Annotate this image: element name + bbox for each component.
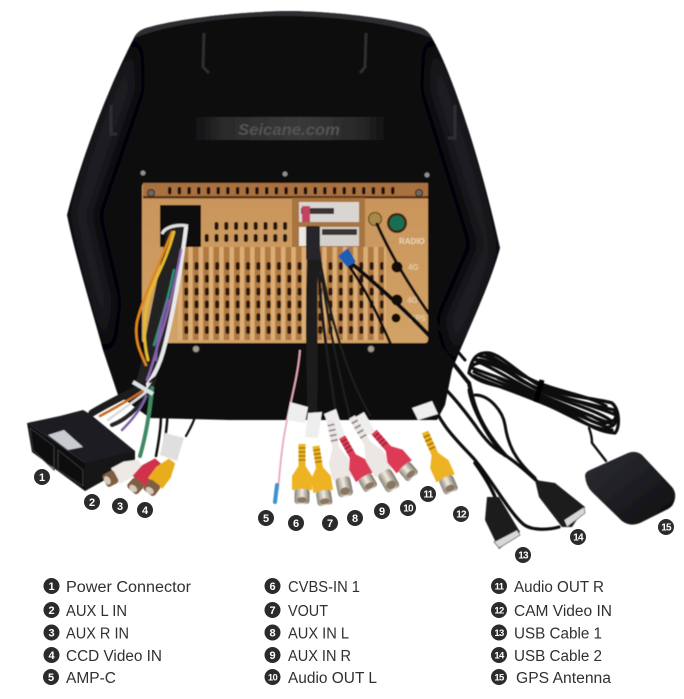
callout 8: 8: [352, 513, 358, 525]
callout 13: 13: [518, 550, 529, 562]
red plug: [125, 455, 165, 497]
legend item 8: AUX IN L: [288, 626, 349, 642]
legend item 15: 15: [494, 672, 505, 684]
legend item 2: AUX L IN: [66, 603, 127, 620]
callout 1: 1: [39, 472, 45, 484]
USB cable 2 plug: [535, 480, 585, 527]
callout 9: 9: [379, 506, 385, 518]
callout 11: 11: [424, 490, 434, 500]
legend item 9: [264, 647, 351, 665]
illustration: head unit and cables: [27, 11, 675, 549]
legend item 14: USB Cable 2: [514, 648, 602, 665]
callout 13: [515, 547, 531, 563]
legend item 7: 7: [269, 605, 276, 617]
legend item 10: Audio OUT L: [288, 670, 377, 687]
callout 15: [658, 519, 674, 535]
white connector block upper: [299, 202, 359, 222]
blue connector: [338, 248, 356, 267]
callout 10: 10: [403, 504, 414, 514]
round sockets: [368, 212, 382, 226]
left RCA plugs: [100, 433, 184, 498]
callout 3: 3: [117, 501, 123, 513]
callout 6: [288, 515, 304, 531]
legend item 3: 3: [48, 628, 55, 640]
left tag: [160, 433, 184, 461]
legend item 4: 4: [48, 650, 55, 662]
centre tags: [287, 401, 438, 440]
yellow plug: [141, 456, 179, 498]
callout numbers: [34, 469, 674, 563]
AMP-C wire: [278, 350, 300, 490]
housing side shading: [70, 42, 497, 360]
legend item 10: 10: [268, 672, 277, 684]
callout 6: 6: [293, 518, 299, 530]
power connector: [27, 410, 135, 491]
legend item 5: [43, 669, 116, 687]
cable tie: [133, 382, 153, 394]
legend item 2: [44, 602, 127, 620]
fan into connector: [92, 386, 143, 413]
legend item 14: 14: [494, 650, 505, 662]
legend item 12: CAM Video IN: [514, 603, 612, 620]
callout 7: 7: [327, 518, 333, 530]
callout 2: 2: [89, 497, 95, 509]
legend item 9: AUX IN R: [288, 648, 351, 665]
red plug 9: [333, 432, 380, 494]
callout 5: [258, 510, 274, 526]
legend item 1: Power Connector: [66, 579, 191, 596]
centre cable bundle: [307, 240, 370, 418]
callout 9: [374, 503, 390, 519]
legend item 9: 9: [269, 650, 276, 662]
screws above panel: [140, 170, 430, 178]
gold rear panel: GPS: [409, 314, 427, 323]
legend item 3: AUX R IN: [66, 626, 129, 642]
callout 4: 4: [142, 505, 149, 517]
wire bundle base: [143, 232, 176, 388]
callout 4: [137, 502, 153, 518]
centre RCA plugs: [292, 412, 461, 507]
legend item 8: 8: [269, 628, 276, 640]
white plug 8: [320, 418, 356, 498]
connector cells: [30, 428, 83, 486]
GPS coil cable: [469, 353, 618, 461]
callout 10: [400, 500, 416, 516]
callout 7: [322, 515, 338, 531]
housing top rim: [134, 11, 432, 38]
legend item 7: [264, 602, 328, 620]
panel labels: RADIO: [399, 237, 425, 246]
legend item 4: CCD Video IN: [66, 648, 162, 665]
callout 3: [112, 498, 128, 514]
legend item 13: 13: [494, 628, 504, 639]
top slot strip: [143, 183, 428, 198]
legend item 1: 1: [48, 581, 55, 593]
mounting clips: [111, 33, 455, 138]
legend item 7: VOUT: [288, 603, 328, 620]
head unit housing: [67, 11, 500, 420]
callout 14: [570, 529, 586, 545]
legend item 5: AMP-C: [66, 670, 116, 687]
white plug 10: [343, 412, 403, 495]
callout 11: [420, 486, 436, 502]
legend item 6: [264, 578, 360, 596]
legend item 13: USB Cable 1: [514, 626, 602, 642]
panel cable tie: [162, 225, 188, 234]
callout 5: 5: [263, 513, 269, 525]
legend item 5: 5: [48, 672, 54, 684]
callout 8: [347, 510, 363, 526]
legend item 3: [44, 624, 129, 642]
mid panel vents: [214, 222, 288, 231]
legend item 8: [264, 624, 349, 642]
gold rear panel: 4G: [407, 296, 418, 305]
coil tie: [536, 380, 542, 402]
callout 12: 12: [456, 510, 467, 520]
connector sticker: [48, 430, 83, 450]
watermark text: Seicane.com: [238, 122, 340, 139]
GPS antenna: [585, 452, 675, 525]
cable cluster near connector: [306, 226, 320, 260]
gold rear panel: [142, 183, 428, 343]
white connector block lower: [299, 227, 359, 246]
connector recess: [292, 198, 365, 254]
legend item 6: 6: [269, 581, 276, 593]
screw heads: [148, 190, 422, 196]
white plug: [100, 455, 144, 490]
legend item 2: 2: [48, 605, 55, 617]
legend item 12: 12: [494, 606, 504, 616]
callout 1: [34, 469, 50, 485]
square black socket: [160, 205, 201, 247]
lower screws: [192, 346, 374, 352]
callout 12: [453, 506, 469, 522]
legend item 11: Audio OUT R: [514, 579, 604, 596]
callout 2: [84, 494, 100, 510]
legend: [43, 578, 612, 687]
fins: [178, 247, 386, 340]
watermark band: [193, 117, 387, 140]
legend item 15: GPS Antenna: [516, 670, 611, 687]
legend item 11: 11: [495, 582, 505, 592]
yellow plug 6: [292, 444, 312, 504]
red plug 11: [366, 425, 421, 484]
callout 14: 14: [573, 532, 584, 544]
gold rear panel: 4G: [408, 263, 419, 272]
AMP-C tip: [275, 485, 277, 502]
yellow plug 12: [416, 428, 461, 496]
legend item 6: CVBS-IN 1: [288, 579, 360, 596]
harness wires: [92, 228, 197, 456]
right cables: [346, 224, 559, 529]
callout 15: 15: [661, 522, 672, 534]
USB cable 1 plug: [485, 497, 520, 549]
yellow plug 7: [306, 444, 335, 507]
